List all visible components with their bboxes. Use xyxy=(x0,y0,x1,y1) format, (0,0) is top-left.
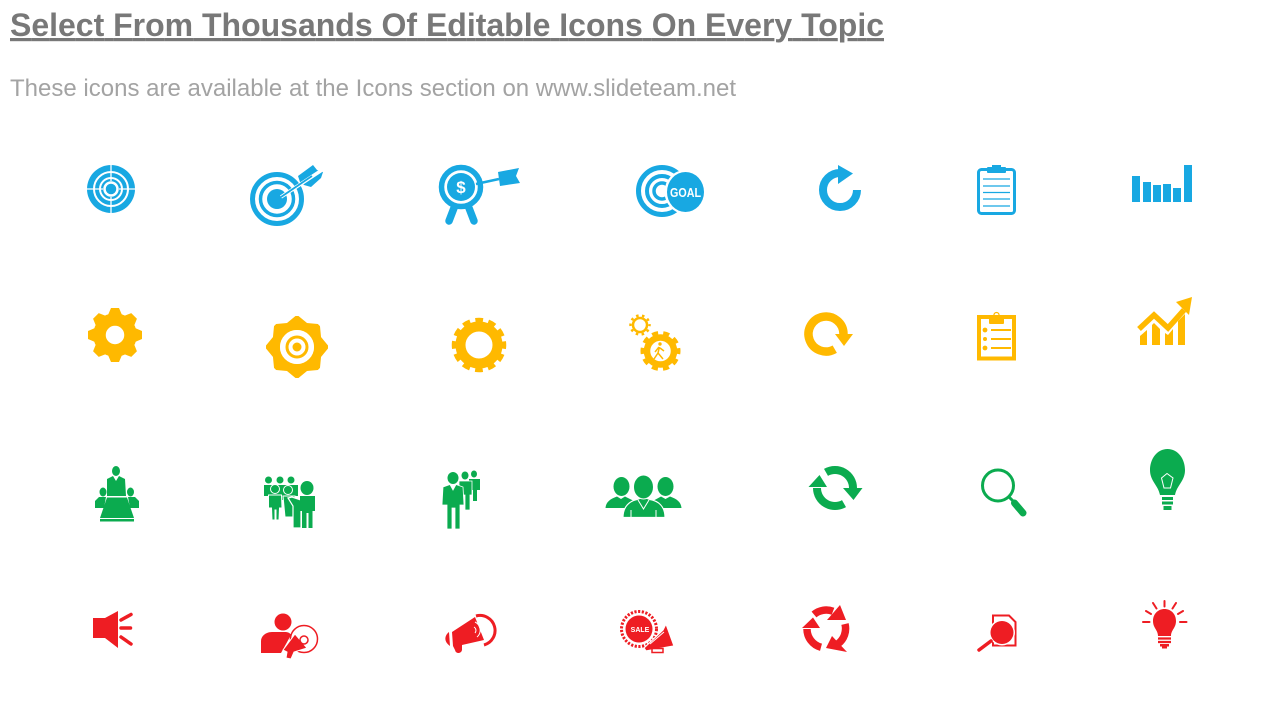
icon: goal target badge xyxy=(638,168,706,214)
icon: row of businessmen xyxy=(442,470,480,529)
icon: clipboard xyxy=(978,165,1014,214)
icon: crosshair target xyxy=(87,165,135,213)
row: red marketing icons xyxy=(93,601,1186,659)
row: blue goal icons xyxy=(87,165,1192,224)
icon: gears with walking person xyxy=(630,316,678,368)
icon: team with presenter xyxy=(264,476,315,528)
icon: light bulb xyxy=(1150,449,1185,510)
subtitle: These icons are available at the Icons section on www.slideteam.net xyxy=(10,75,736,102)
icon: person with megaphone target xyxy=(261,614,318,659)
icon: speaker xyxy=(93,611,131,648)
icon: shining light bulb xyxy=(1143,601,1186,648)
icon: magnifying glass xyxy=(982,470,1023,513)
icon: growth chart arrow xyxy=(1139,297,1192,345)
row: yellow process icons xyxy=(88,297,1192,378)
icon: cycle arrow xyxy=(808,316,853,351)
icon: dollar target with dart xyxy=(442,168,520,221)
icon: three-arrow recycle xyxy=(802,605,847,652)
icon: document with magnifier xyxy=(979,616,1016,650)
icon: two-arrow refresh xyxy=(808,470,862,506)
icon: goal target badge: GOAL xyxy=(670,186,701,200)
icon: group of three people xyxy=(606,475,682,518)
row: green people icons xyxy=(95,449,1185,529)
icon: sale badge with megaphone xyxy=(622,612,674,652)
icon: sale badge with megaphone: SALE xyxy=(631,627,650,634)
icon: cog wheel xyxy=(454,320,504,370)
icon: boardroom meeting xyxy=(95,466,139,522)
icon: megaphone xyxy=(445,615,495,653)
icon: scalloped gear with target xyxy=(266,316,328,378)
icon: bar chart xyxy=(1132,165,1192,202)
icon: gear xyxy=(88,308,142,362)
icon: checklist clipboard xyxy=(979,312,1014,358)
title: Select From Thousands Of Editable Icons On Every Topic xyxy=(10,7,884,43)
icon: refresh arrow xyxy=(823,165,857,207)
icon: bullseye with arrow xyxy=(252,165,323,224)
icon: dollar target with dart: $ xyxy=(456,178,466,197)
